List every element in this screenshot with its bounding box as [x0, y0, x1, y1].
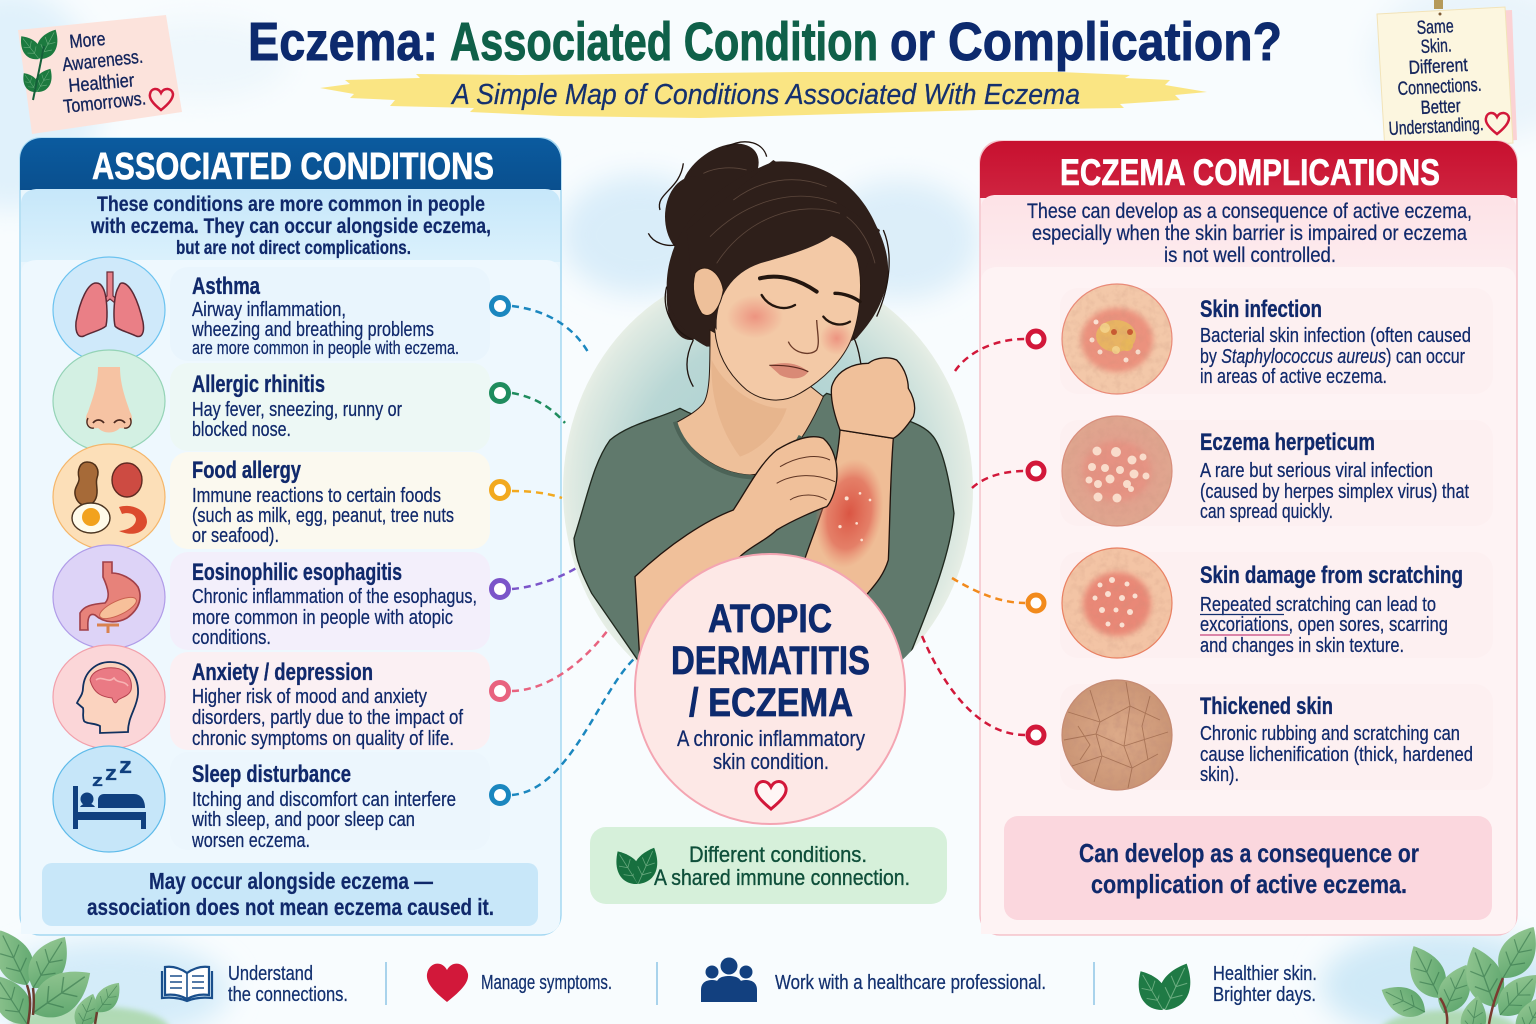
collar — [675, 422, 801, 477]
icon: stomach — [53, 545, 165, 649]
text: eosinophilic esophagitis: more common in people with atopic — [192, 607, 453, 629]
intro block: with eczema. They can occur alongside eczema, — [90, 215, 491, 238]
item: eosinophilic esophagitis — [53, 545, 490, 650]
face — [714, 233, 861, 400]
item: sleep disturbance — [53, 746, 490, 852]
icon: heart — [756, 781, 786, 809]
item: skin infection — [1060, 284, 1493, 394]
icon: head and brain — [53, 645, 165, 749]
icon: pin — [1434, 0, 1443, 16]
panel: associated conditions — [20, 138, 561, 935]
intro block: but are not direct complications. — [176, 237, 411, 259]
item: skin damage from scratching — [1060, 548, 1493, 658]
callout: may occur alongside: May occur alongside eczema — — [149, 868, 433, 894]
panel header — [980, 141, 1517, 198]
footer item: healthier skin: Healthier skin. — [1213, 962, 1317, 985]
image: herpeticum skin — [1062, 416, 1172, 526]
intro block: is not well controlled. — [1164, 244, 1336, 267]
note text: Skin. — [1420, 35, 1452, 58]
neck shadow — [711, 360, 787, 457]
icon: leaves — [608, 843, 664, 890]
text: anxiety / depression: chronic symptoms on quality of life. — [192, 728, 454, 750]
footer item: healthier skin — [1130, 958, 1317, 1016]
text: eosinophilic esophagitis — [192, 559, 477, 649]
text: eczema herpeticum: can spread quickly. — [1200, 501, 1333, 523]
text: eczema herpeticum: A rare but serious viral infection — [1200, 460, 1433, 482]
neck — [675, 330, 823, 475]
icon: bed — [53, 746, 165, 852]
item: asthma — [53, 257, 490, 363]
hair strands — [648, 142, 889, 387]
text: eosinophilic esophagitis: conditions. — [192, 627, 271, 649]
icon: nose — [53, 350, 165, 452]
text: allergic rhinitis — [192, 371, 402, 441]
intro block — [21, 189, 560, 262]
callout: can develop: Can develop as a consequence or — [1079, 838, 1419, 868]
illustration: woman scratching arm — [563, 130, 973, 715]
hair top and fringe — [687, 160, 880, 330]
text: food allergy — [192, 457, 454, 547]
text: eczema herpeticum: Eczema herpeticum — [1200, 429, 1375, 456]
list background — [981, 267, 1516, 934]
center circle: atopic dermatitis: ATOPIC — [708, 597, 832, 641]
mouth — [769, 363, 808, 378]
note text: Awareness. — [61, 47, 144, 76]
text: asthma: Asthma — [192, 273, 260, 300]
note text: Healthier — [68, 70, 136, 97]
icon: note heart — [1486, 113, 1509, 134]
raised forearm — [805, 430, 893, 597]
text: thickened skin: Chronic rubbing and scratching can — [1200, 723, 1460, 745]
text: eczema herpeticum: (caused by herpes simplex virus) that — [1200, 481, 1469, 503]
fist — [831, 358, 915, 438]
text: skin damage: excoriations, open sores, scarring — [1200, 614, 1448, 636]
text: skin infection: by Staphylococcus aureus) can occur — [1200, 346, 1465, 368]
note text: Better — [1420, 96, 1462, 119]
text: thickened skin: Thickened skin — [1200, 693, 1333, 720]
text: sleep disturbance — [191, 761, 456, 852]
decoration: corner leaves right — [1375, 918, 1536, 1024]
title: Complication? — [948, 12, 1282, 72]
text: food allergy: (such as milk, egg, peanut, tree nuts — [192, 505, 454, 527]
icon: lungs — [53, 257, 165, 363]
icon: bed: z — [105, 763, 117, 785]
panel header — [20, 138, 561, 190]
image: thickened skin — [1062, 680, 1172, 790]
text: sleep disturbance: with sleep, and poor sleep can — [191, 809, 415, 831]
item: eczema herpeticum — [1060, 416, 1493, 526]
image: infected skin — [1062, 284, 1172, 394]
callout: can develop — [1004, 816, 1492, 920]
text: sleep disturbance: worsen eczema. — [191, 830, 310, 852]
list background — [21, 260, 560, 934]
callout: may occur alongside: association does not mean eczema caused it. — [87, 894, 494, 920]
finger lines — [777, 457, 835, 500]
hair back and bun — [665, 130, 888, 347]
text: anxiety / depression — [192, 659, 463, 750]
connectors: right nodes — [922, 339, 1025, 735]
center circle: atopic dermatitis: A chronic inflammatory — [677, 726, 865, 751]
title — [248, 12, 1282, 72]
text: sleep disturbance: Itching and discomfort can interfere — [192, 789, 456, 811]
footer item: understand — [162, 962, 348, 1006]
item: food allergy — [53, 444, 490, 550]
text: sleep disturbance: Sleep disturbance — [192, 761, 351, 788]
item: allergic rhinitis — [53, 350, 490, 452]
connector nodes — [492, 298, 1044, 804]
icon: note leaves — [15, 25, 64, 100]
cheek rashes — [727, 295, 783, 338]
callout: can develop: complication of active eczema. — [1091, 869, 1407, 899]
center circle: atopic dermatitis: / ECZEMA — [689, 681, 853, 725]
text: anxiety / depression: disorders, partly due to the impact of — [192, 707, 463, 729]
note text: More — [69, 29, 106, 53]
text: food allergy: Immune reactions to certain foods — [192, 485, 441, 507]
title: Associated Condition — [450, 12, 878, 72]
text: skin damage: and changes in skin texture. — [1200, 635, 1404, 657]
icon: heart — [427, 964, 468, 1002]
note text: Understanding. — [1388, 114, 1484, 140]
note text — [1388, 16, 1484, 140]
text: asthma: are more common in people with eczema. — [192, 337, 459, 358]
panel: eczema complications — [980, 141, 1517, 935]
text: allergic rhinitis: Hay fever, sneezing, runny or — [192, 399, 402, 421]
footer item: manage symptoms — [427, 964, 612, 1002]
intro block: especially when the skin barrier is impaired or eczema — [1032, 222, 1467, 245]
intro block: These can develop as a consequence of active eczema, — [1027, 200, 1472, 223]
text: thickened skin: cause lichenification (thick, hardened — [1200, 744, 1473, 766]
icon: book — [162, 967, 212, 1001]
nose — [788, 320, 818, 353]
shirt — [574, 393, 954, 663]
egg — [72, 503, 110, 533]
text: food allergy: or seafood). — [192, 525, 279, 547]
title: Eczema: — [248, 12, 438, 72]
footer item: understand: Understand — [228, 962, 313, 985]
arm rash — [807, 453, 892, 573]
footer item: manage symptoms: Manage symptoms. — [481, 971, 612, 994]
meat — [112, 463, 142, 497]
center circle: atopic dermatitis: skin condition. — [713, 749, 829, 774]
hair highlights — [703, 168, 875, 263]
center circle: atopic dermatitis — [635, 554, 905, 824]
footer item: understand: the connections. — [228, 983, 348, 1006]
callout: may occur alongside — [42, 863, 538, 926]
subtitle with yellow brush — [320, 72, 1207, 118]
text: thickened skin: skin). — [1200, 764, 1239, 786]
icon: leaves — [1130, 958, 1200, 1016]
shrimp — [119, 506, 147, 534]
icon: food — [53, 444, 165, 550]
footer item: healthcare professional — [701, 958, 1046, 1002]
note text: Connections. — [1397, 75, 1482, 100]
watercolor oval — [563, 265, 973, 715]
note text: Same — [1416, 16, 1454, 39]
text: skin damage: Skin damage from scratching — [1200, 562, 1463, 589]
item: anxiety / depression — [53, 645, 490, 750]
text: asthma — [191, 273, 459, 358]
center circle: atopic dermatitis: DERMATITIS — [671, 639, 870, 683]
text: anxiety / depression: Anxiety / depression — [192, 659, 373, 686]
text: allergic rhinitis: blocked nose. — [192, 419, 291, 441]
subtitle with yellow brush: A Simple Map of Conditions Associated With Eczema — [450, 79, 1080, 111]
note: same skin — [1377, 0, 1517, 151]
text: thickened skin — [1200, 693, 1473, 786]
text: skin infection: Skin infection — [1200, 296, 1322, 323]
icon: bed: z — [92, 771, 103, 790]
note text — [61, 29, 147, 118]
footer item: healthcare professional: Work with a healthcare professional. — [775, 971, 1046, 994]
note text: Different — [1408, 55, 1469, 79]
heading: eczema complications: ECZEMA COMPLICATIONS — [1060, 152, 1440, 193]
note: more awareness — [15, 15, 182, 134]
text: skin damage: Repeated scratching can lead to — [1200, 594, 1436, 616]
icon: people — [701, 958, 757, 1002]
text: skin damage — [1200, 562, 1463, 657]
callout: shared immune connection: A shared immune connection. — [654, 865, 910, 890]
icon: bed: z — [119, 753, 132, 778]
text: eosinophilic esophagitis: Eosinophilic esophagitis — [192, 559, 402, 586]
peanut — [75, 462, 98, 506]
text: allergic rhinitis: Allergic rhinitis — [192, 371, 325, 398]
scratching arm and hand — [635, 437, 837, 663]
intro block: These conditions are more common in people — [97, 193, 485, 216]
heading: associated conditions: ASSOCIATED CONDITIONS — [92, 146, 494, 188]
text: skin infection: Bacterial skin infection (often caused — [1200, 325, 1471, 347]
callout: shared immune connection: Different conditions. — [689, 842, 867, 867]
ear — [693, 268, 723, 315]
item: thickened skin — [1060, 680, 1493, 790]
eyebrows — [760, 277, 860, 302]
text: eczema herpeticum — [1200, 429, 1469, 523]
text: eosinophilic esophagitis: Chronic inflammation of the esophagus, — [192, 586, 477, 608]
intro block — [981, 195, 1516, 270]
text: anxiety / depression: Higher risk of mood and anxiety — [192, 686, 427, 708]
text: asthma: wheezing and breathing problems — [191, 319, 434, 341]
title: or — [890, 12, 935, 72]
text: skin infection — [1200, 296, 1471, 388]
text: asthma: Airway inflammation, — [192, 299, 346, 321]
footer item: healthier skin: Brighter days. — [1213, 983, 1316, 1006]
closed eyes — [762, 295, 850, 324]
text: food allergy: Food allergy — [192, 457, 301, 484]
connectors: left nodes — [512, 306, 635, 795]
image: scratched skin — [1062, 548, 1172, 658]
note text: Tomorrows. — [62, 88, 147, 118]
icon: note heart — [150, 89, 173, 110]
text: skin infection: in areas of active eczema. — [1200, 366, 1387, 388]
footer strip — [162, 958, 1317, 1016]
callout: shared immune connection — [590, 827, 947, 904]
decoration: corner leaves left — [0, 923, 170, 1024]
